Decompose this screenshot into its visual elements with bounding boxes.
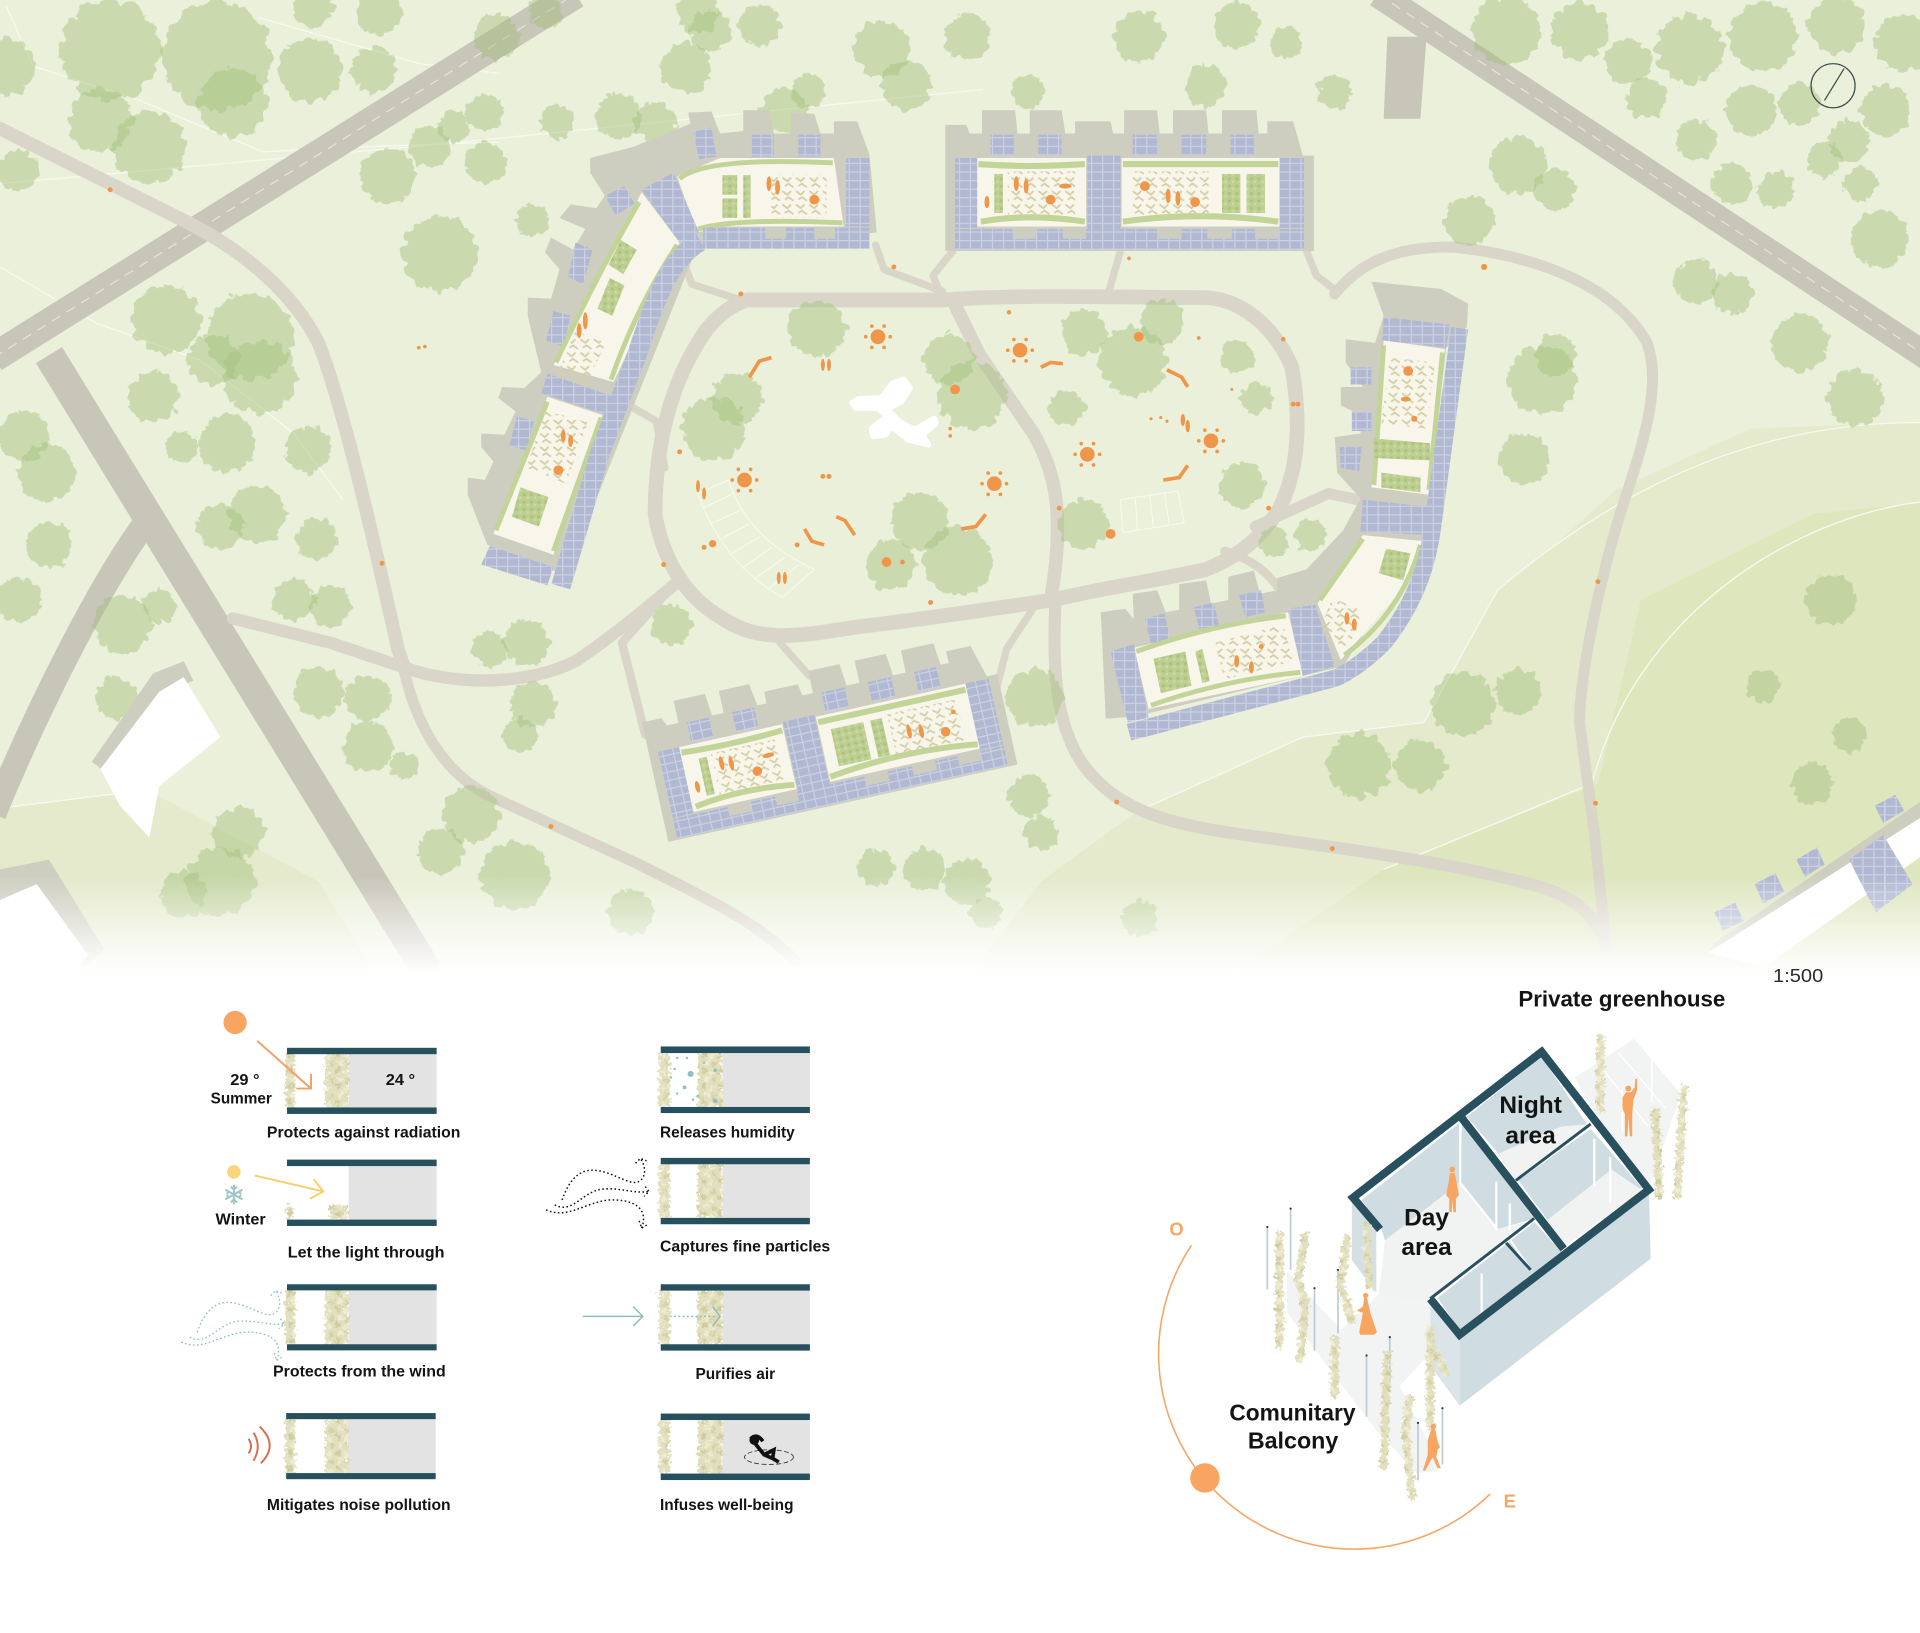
panel: mitigates noise pollution: [249, 1413, 451, 1514]
white house west: [92, 661, 220, 838]
icon: summer sun: [223, 1011, 247, 1034]
arrow: incoming air: [583, 1307, 643, 1326]
north arrow: [1811, 64, 1855, 108]
arrow: purified air: [670, 1307, 720, 1326]
building: south-east curved: [1101, 282, 1468, 732]
climbing plants: [1280, 1038, 1684, 1496]
label: night area: Night: [1499, 1092, 1562, 1119]
caption: Captures fine particles: [660, 1238, 830, 1255]
day-area side wall: [1352, 1200, 1376, 1293]
icon: humidity droplets: [670, 1057, 717, 1103]
icon: wind: [181, 1291, 284, 1360]
label: balcony second line: Balcony: [1248, 1428, 1338, 1454]
icon: particle flow: [546, 1158, 649, 1228]
caption: Mitigates noise pollution: [267, 1497, 451, 1514]
day-area side partition: [1460, 1123, 1534, 1229]
partition walls: [1430, 1124, 1591, 1299]
season label: winter: Winter: [216, 1212, 266, 1229]
building south-east corner: [1708, 795, 1920, 967]
greenhouse glazing: [1602, 1038, 1681, 1133]
label: private greenhouse: Private greenhouse: [1518, 987, 1725, 1012]
label: day area: Day: [1404, 1205, 1449, 1232]
icon: relaxing person: [744, 1435, 793, 1464]
sun path arc: [1159, 1245, 1490, 1549]
meadow zones: [0, 6, 1920, 980]
panel: captures fine particles: [546, 1158, 830, 1255]
building: north: [945, 110, 1314, 251]
label: day area second line: area: [1401, 1234, 1452, 1261]
panel: releases humidity: [659, 1046, 810, 1142]
compass label E: E: [1504, 1490, 1516, 1511]
panel: infuses well-being: [659, 1414, 810, 1514]
label: night area second line: area: [1505, 1123, 1556, 1150]
service room floor: [1548, 1169, 1642, 1245]
caption: Let the light through: [288, 1245, 444, 1262]
sun: [1190, 1463, 1220, 1493]
white building south-west corner: [0, 860, 104, 973]
outer side facade: [1460, 1190, 1651, 1406]
site plan background: [0, 0, 1920, 980]
night-area walls: [1467, 1057, 1587, 1180]
caption: Infuses well-being: [660, 1497, 793, 1514]
scale label: 1:500: [1773, 965, 1823, 986]
panel: let the light through: [216, 1160, 444, 1262]
day-area back wall: [1362, 1123, 1460, 1240]
play equipment: tables and benches: [108, 187, 1600, 851]
communal balcony floor: [1287, 1271, 1442, 1473]
structural walls: [1353, 1052, 1649, 1335]
white playground shape: [852, 380, 936, 444]
icon: snowflake: [225, 1185, 242, 1204]
service room walls: [1518, 1129, 1642, 1245]
door openings: [1460, 1123, 1610, 1314]
building: north-west curved: [468, 110, 877, 587]
icon: winter sun: [227, 1165, 241, 1179]
arrow: radiation: [257, 1041, 311, 1089]
residents: [1357, 1079, 1637, 1471]
panel: protects against radiation: [211, 1011, 460, 1142]
night-area floor: [1499, 1124, 1591, 1180]
fade to white: [0, 876, 1920, 973]
summer temperature: 29 °: [230, 1072, 260, 1089]
footpaths: [0, 129, 1653, 961]
interior temperature: 24 °: [386, 1072, 415, 1089]
roads: [0, 0, 1920, 973]
caption: Protects from the wind: [273, 1363, 446, 1380]
label: communitary balcony: Comunitary: [1229, 1399, 1356, 1425]
arrow: winter light: [255, 1176, 323, 1199]
grey annex block: [1384, 37, 1427, 119]
trees: [0, 0, 1920, 937]
panel: protects from the wind: [181, 1284, 446, 1380]
caption: Releases humidity: [660, 1125, 795, 1142]
day-area floor: [1379, 1183, 1534, 1299]
court outline: [1120, 491, 1184, 533]
caption: Protects against radiation: [267, 1125, 460, 1142]
balcony posts: [1267, 1209, 1442, 1480]
building: south: [639, 631, 1017, 842]
icon: noise waves: [249, 1427, 270, 1463]
curved parking outline: [698, 480, 814, 598]
panel: purifies air: [583, 1284, 810, 1383]
bath room walls: [1438, 1222, 1561, 1330]
end facade: [1430, 1299, 1460, 1406]
private greenhouse floor: [1575, 1038, 1681, 1190]
axonometric apartment: [1266, 1038, 1684, 1496]
caption: Purifies air: [696, 1366, 775, 1383]
season label: summer: Summer: [211, 1090, 272, 1107]
post caps: [1266, 1207, 1444, 1424]
compass label O: O: [1169, 1219, 1184, 1240]
